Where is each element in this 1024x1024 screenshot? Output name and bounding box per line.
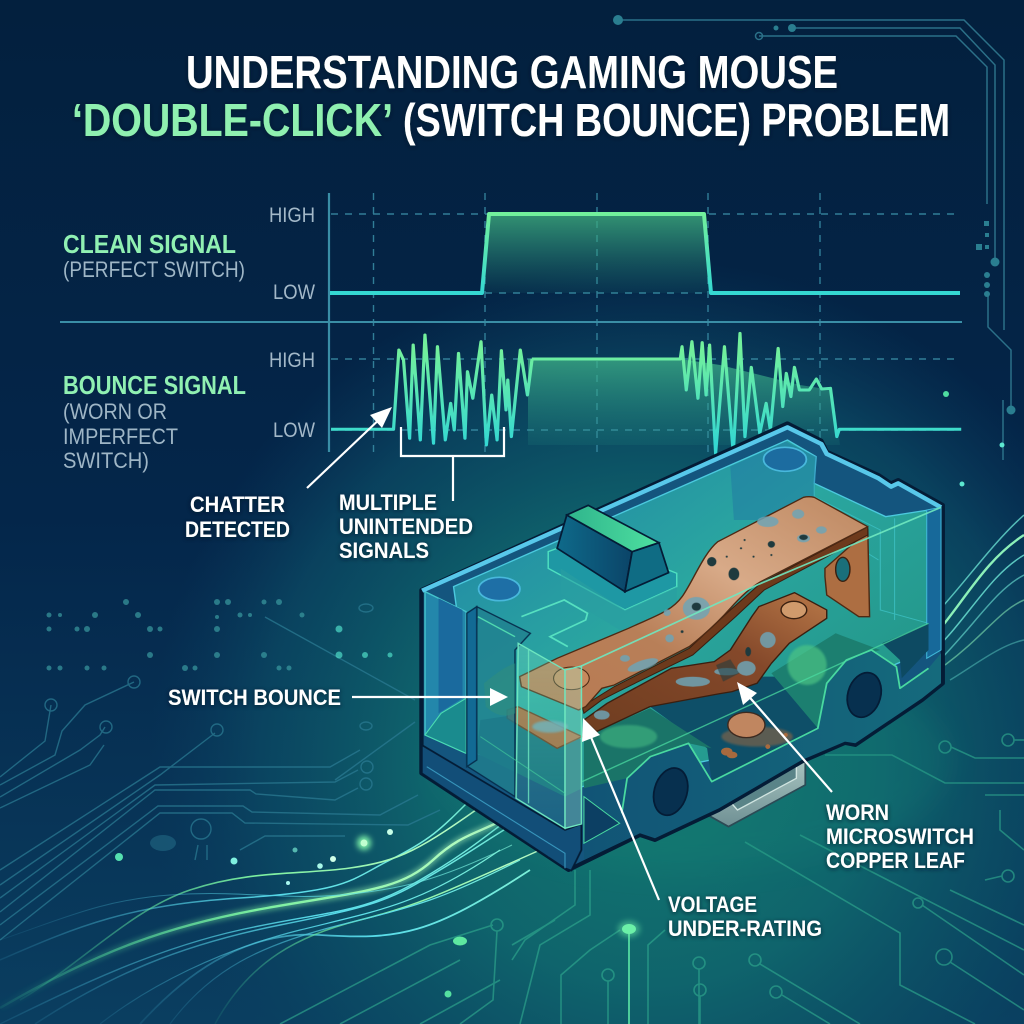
clean signal label [63,229,245,282]
left hole [649,765,693,819]
label: chatter detected: CHATTER [190,492,285,517]
lower copper leaf [584,593,827,732]
axis labels: HIGH [269,349,315,372]
screw post back [764,447,806,471]
arrow: worn leaf [737,682,832,792]
bounce signal waveform [331,333,961,453]
label: voltage under-rating: VOLTAGE [668,892,757,917]
pits and speckles [681,535,808,682]
bounce signal label: (WORN OR [63,399,167,424]
annotation arrows [307,407,832,900]
upper copper leaf [520,497,868,710]
front base band [422,745,581,871]
right wall [927,507,941,658]
partition inner floor [484,663,515,716]
arrow: switch bounce [352,688,508,706]
glass top edge [581,507,941,666]
energy waves: right edge [930,515,1024,680]
green lobe right [771,633,880,728]
green lobe left [584,708,712,788]
axis labels: LOW [273,419,315,442]
clean signal waveform [330,214,960,293]
label: chatter detected [185,492,290,542]
title: UNDERSTANDING GAMING MOUSE [186,46,838,98]
bracket hole [836,557,850,581]
axis labels: HIGH [269,204,315,227]
screw post front [479,577,520,601]
floor behind glass [477,713,582,797]
microswitch illustration [421,423,943,871]
label: multiple unintended signals: MULTIPLE [339,490,437,515]
circuit traces: bottom [280,734,1024,1024]
left floor [425,698,466,753]
partition green frame [478,617,515,637]
dark gap beside corner [584,797,620,843]
title: ‘DOUBLE-CLICK’ [72,94,393,146]
front block outline [622,650,929,813]
green patch left [600,725,657,748]
corrosion spots [532,509,827,733]
label: worn microswitch copper leaf: COPPER LEAF [826,848,965,873]
title [72,46,950,146]
signal trace with glowing end [628,932,630,1024]
bottom silver tab [702,760,805,827]
label: multiple unintended signals: SIGNALS [339,538,429,563]
floor rivet [728,712,765,738]
pad rivet [554,667,589,690]
bracket: multiple signals [401,427,504,501]
glass inner strip [527,650,530,803]
green patch right [787,645,827,685]
button top [567,505,659,552]
bounce signal label: BOUNCE SIGNAL [63,370,246,400]
bounce signal label: IMPERFECT [63,424,178,449]
glass lower edge [582,623,929,782]
glass corner strip [565,666,581,828]
label: worn microswitch copper leaf [826,800,974,873]
button collar [548,548,677,610]
base band light edge [427,767,565,868]
left wall [425,592,466,753]
glow under microswitch [430,650,950,870]
clean signal label: (PERFECT SWITCH) [63,257,245,282]
top rim [422,427,941,591]
glass front left panel [516,643,565,828]
dot matrix pattern [46,599,392,671]
label: voltage under-rating [668,892,822,941]
energy waves: lower left [0,800,540,1024]
right hole [842,669,886,721]
clean signal label: CLEAN SIGNAL [63,229,236,259]
interior back wall [454,440,929,787]
back wall shaded panel [730,442,816,520]
label: worn microswitch copper leaf: WORN [826,800,889,825]
glowing particles [115,829,640,998]
label: chatter detected: DETECTED [185,517,290,542]
label: multiple unintended signals: UNINTENDED [339,514,473,539]
glass base edge [480,737,565,793]
channel detail [521,600,587,647]
circuit traces: lower left [0,604,440,940]
tab recess [729,765,796,810]
right pocket [882,623,929,678]
label: worn microswitch copper leaf: MICROSWITCH [826,824,974,849]
dark floor [650,677,818,782]
copper rust on floor [721,727,793,758]
right wall panels [814,483,929,623]
front block [584,650,941,860]
label: multiple unintended signals [339,490,473,563]
bounce signal label [63,370,246,473]
axis labels: LOW [273,281,315,304]
label: switch bounce: SWITCH BOUNCE [168,685,341,710]
partition post [467,607,477,767]
upper leaf bracket [825,530,870,617]
label: voltage under-rating: UNDER-RATING [668,916,822,941]
axis labels [269,204,315,442]
lower leaf pad [507,707,582,748]
left wall dark strip [439,598,462,713]
button left face [557,515,632,592]
upper leaf shadow edge [582,527,868,713]
circuit traces: top right [613,15,1016,486]
button right face [625,543,669,592]
leaf rivet [781,601,807,619]
partition panel [468,607,530,797]
arrow: voltage under-rating [582,718,659,900]
arrow: chatter [307,407,392,488]
housing silhouette [421,423,943,870]
callout labels [168,490,974,941]
signal chart grid [60,193,962,452]
button stem [561,568,677,633]
bounce signal label: SWITCH) [63,448,149,473]
